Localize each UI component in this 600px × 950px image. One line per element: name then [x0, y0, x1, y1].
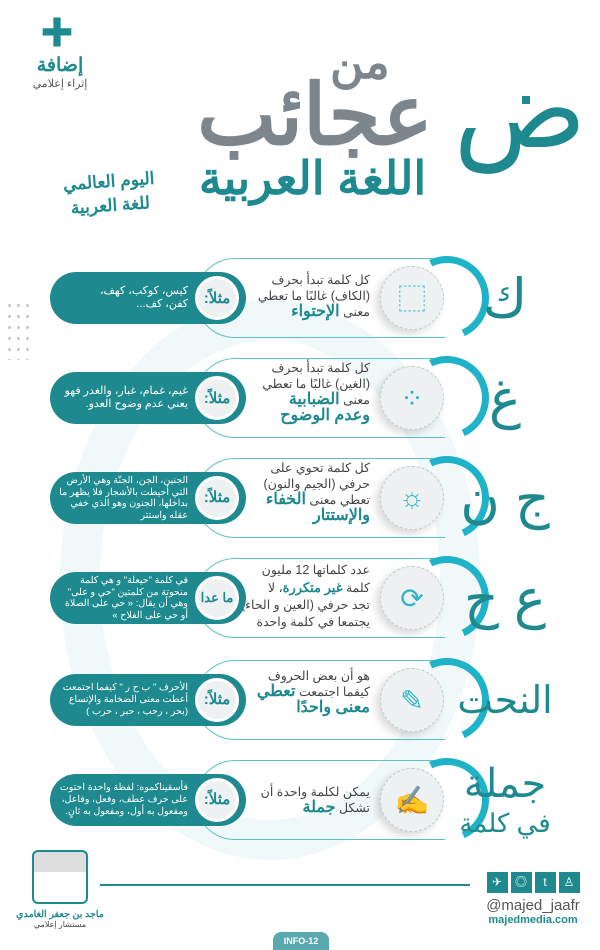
- description: كل كلمة تحوي على: [270, 461, 370, 475]
- title: من: [330, 36, 390, 88]
- description: [262, 359, 370, 424]
- description: تشكل جملة: [302, 799, 370, 816]
- exception pill: [50, 572, 246, 624]
- badge: world arabic day: [62, 169, 155, 218]
- description: (الغين) غالبًا ما تعطي: [262, 377, 370, 391]
- example pill: غيم، غمام، غبار، والغدر فهو يعني عدم وضوح العدو.: [65, 385, 188, 410]
- label: جملة: [464, 762, 546, 806]
- description: عدد كلماتها 12 مليون: [262, 563, 370, 577]
- icon: box: ⬚: [398, 284, 426, 315]
- icon: sun: [380, 466, 444, 530]
- example pill: الجنين، الجن، الجنّة وهي الأرض التي أحيطت بالأشجار فلا يظهر ما بداخلها، الجنون وهو الذي خفي عقله واستتر: [59, 475, 188, 520]
- description: يجتمعا في كلمة واحدة: [256, 615, 370, 629]
- icon: box: [380, 266, 444, 330]
- example pill: [50, 674, 246, 726]
- example pill: [50, 372, 246, 424]
- description: [257, 667, 370, 716]
- description: هو أن بعض الحروف: [268, 669, 370, 683]
- icon: writing hand: ✍: [395, 784, 429, 816]
- icon: cycle: ⟳: [400, 582, 424, 614]
- photo: [32, 850, 88, 904]
- author: ماجد بن جعفر الغامدي: [16, 909, 104, 920]
- exception pill: ما عدا: [201, 590, 233, 605]
- row 1: [50, 256, 527, 338]
- example pill: فأسقيناكموه: لفظة واحدة احتوت على حرف عطف، وفعل، وفاعل، ومفعول به أول، ومفعول به ثانٍ.: [60, 782, 188, 817]
- row 3: [50, 456, 550, 538]
- description: (الكاف) غالبًا ما تعطي: [258, 289, 370, 303]
- icon: cycle: [380, 566, 444, 630]
- icon: pen: [380, 668, 444, 732]
- description: معنى واحدًا: [296, 699, 370, 716]
- label: النحت: [457, 680, 553, 722]
- description: معنى الإحتواء: [291, 303, 370, 320]
- label: في كلمة: [459, 808, 551, 838]
- exception pill: في كلمة "حيعلة" و هي كلمة منحوتة من كلمتين "حي و على" وهي أن يقال: « حي على الصلاة أو حي على الفلاح »: [65, 575, 188, 620]
- example pill: [50, 272, 246, 324]
- author: [16, 850, 104, 929]
- info tag: [273, 932, 329, 950]
- description: تعطي معنى الخفاء: [266, 491, 370, 508]
- letter: ع ح: [464, 568, 546, 628]
- example pill: مثلاً:: [204, 390, 230, 406]
- description: [264, 461, 370, 524]
- title: عجائب: [197, 68, 433, 162]
- title: اللغة العربية: [199, 152, 426, 204]
- icon: dots: ⁘: [400, 382, 424, 414]
- calligraphy decoration: ض: [454, 49, 586, 171]
- info tag: INFO-12: [284, 936, 318, 946]
- description: [261, 783, 370, 816]
- description: كلمة غير متكررة، لا: [268, 580, 370, 595]
- social: [486, 872, 580, 926]
- description: [258, 271, 370, 320]
- row 4: [50, 556, 546, 638]
- example pill: مثلاً:: [204, 290, 230, 306]
- social: ♙: [564, 875, 574, 889]
- row 2: [50, 356, 521, 438]
- example pill: [50, 774, 246, 826]
- letter: غ: [489, 368, 521, 428]
- description: كيفما اجتمعت تعطي: [257, 683, 370, 700]
- description: معنى الضبابية: [289, 391, 370, 408]
- example pill: الأحرف " ب ح ر " كيفما اجتمعت أعطت معنى الضخامة والإتساع (بحر ، رحب ، حبر ، حرب ): [63, 682, 188, 717]
- description: حرفي (الجيم والنون): [264, 477, 370, 491]
- row 6: [50, 758, 551, 840]
- footer line: [100, 884, 470, 886]
- author: مستشار إعلامي: [34, 920, 86, 929]
- row 5: [50, 658, 553, 740]
- social: majedmedia.com: [488, 914, 578, 926]
- description: تجد حرفي (العين و الحاء): [241, 598, 370, 612]
- icon: pen: ✎: [400, 684, 424, 716]
- icon: sun: ☼: [399, 482, 425, 513]
- description: كل كلمة تبدأ بحرف: [271, 273, 370, 287]
- icon: writing hand: [380, 768, 444, 832]
- badge: world arabic day: للغة العربية: [70, 193, 151, 218]
- icon: dots: [380, 366, 444, 430]
- social: ✈: [492, 875, 502, 889]
- logo: [33, 15, 87, 90]
- example pill: كيس، كوكب، كهف،: [100, 285, 188, 297]
- description: يمكن لكلمة واحدة أن: [261, 785, 370, 799]
- icon: plus: ✚: [40, 15, 74, 53]
- badge: world arabic day: اليوم العالمي: [62, 169, 155, 194]
- letter: ك: [483, 268, 527, 328]
- logo: إثراء إعلامي: [33, 78, 87, 90]
- social: t: [543, 875, 547, 889]
- background watermark: [60, 300, 480, 860]
- letter: ج ن: [460, 468, 550, 528]
- description: والإستتار: [313, 507, 370, 524]
- dots: [5, 300, 35, 360]
- description: كل كلمة تبدأ بحرف: [271, 361, 370, 375]
- example pill: مثلاً:: [204, 791, 230, 808]
- example pill: [50, 472, 246, 524]
- logo: إضافة: [37, 55, 83, 76]
- social: ◎: [515, 875, 527, 889]
- title: [197, 36, 433, 206]
- social: @majed_jaafr: [486, 897, 580, 914]
- description: وعدم الوضوح: [280, 407, 370, 424]
- example pill: مثلاً:: [204, 489, 230, 506]
- label: [459, 762, 551, 838]
- example pill: مثلاً:: [204, 691, 230, 708]
- description: [241, 563, 370, 629]
- example pill: كفن، كف...: [136, 298, 188, 310]
